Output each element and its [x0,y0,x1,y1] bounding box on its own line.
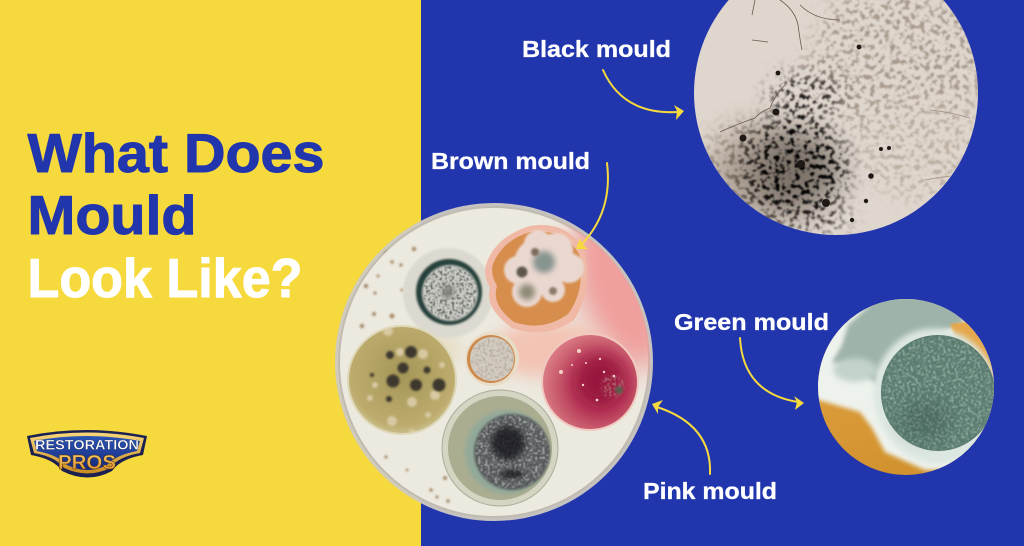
arrow: Black mould [603,70,684,120]
colony: small tan centre [465,332,519,386]
logo: Restoration Pros [27,430,147,478]
arrow: Brown mould [576,163,608,249]
colony: teal and white [403,248,493,338]
blue right panel [421,0,1024,546]
orange edge right [949,320,994,452]
dark colony [741,73,850,230]
dish rim [335,203,653,521]
label: Pink mould: Pink mould [643,478,777,504]
colony: orange with white flower [485,225,587,332]
petri dish photo [335,203,653,521]
colony: pink red [541,333,639,431]
title: What Does [28,122,324,184]
label: Green mould: Green mould [674,309,829,335]
photo: black mould circle [694,0,990,240]
upper grey-green colony [832,296,968,385]
title: Look Like? [28,247,302,309]
colony: yellow olive with dark clumps [347,325,457,435]
title [28,122,324,309]
medium stains [358,224,650,504]
title: Mould [28,184,196,246]
logo: Restoration Pros: RESTORATION [35,436,139,452]
photo: green mould circle [818,299,994,475]
logo: Restoration Pros: PROS [58,452,116,474]
arrow: Green mould [740,338,804,410]
yellow left panel [0,0,421,546]
light speckle [703,0,978,224]
colony: dark grey-green [442,390,558,506]
white mycelium band [818,299,994,473]
label: Black mould: Black mould [522,36,671,62]
arrow: Pink mould [652,400,710,474]
white flower colony [504,230,584,307]
main green colony [873,325,994,465]
label: Brown mould: Brown mould [431,148,590,174]
